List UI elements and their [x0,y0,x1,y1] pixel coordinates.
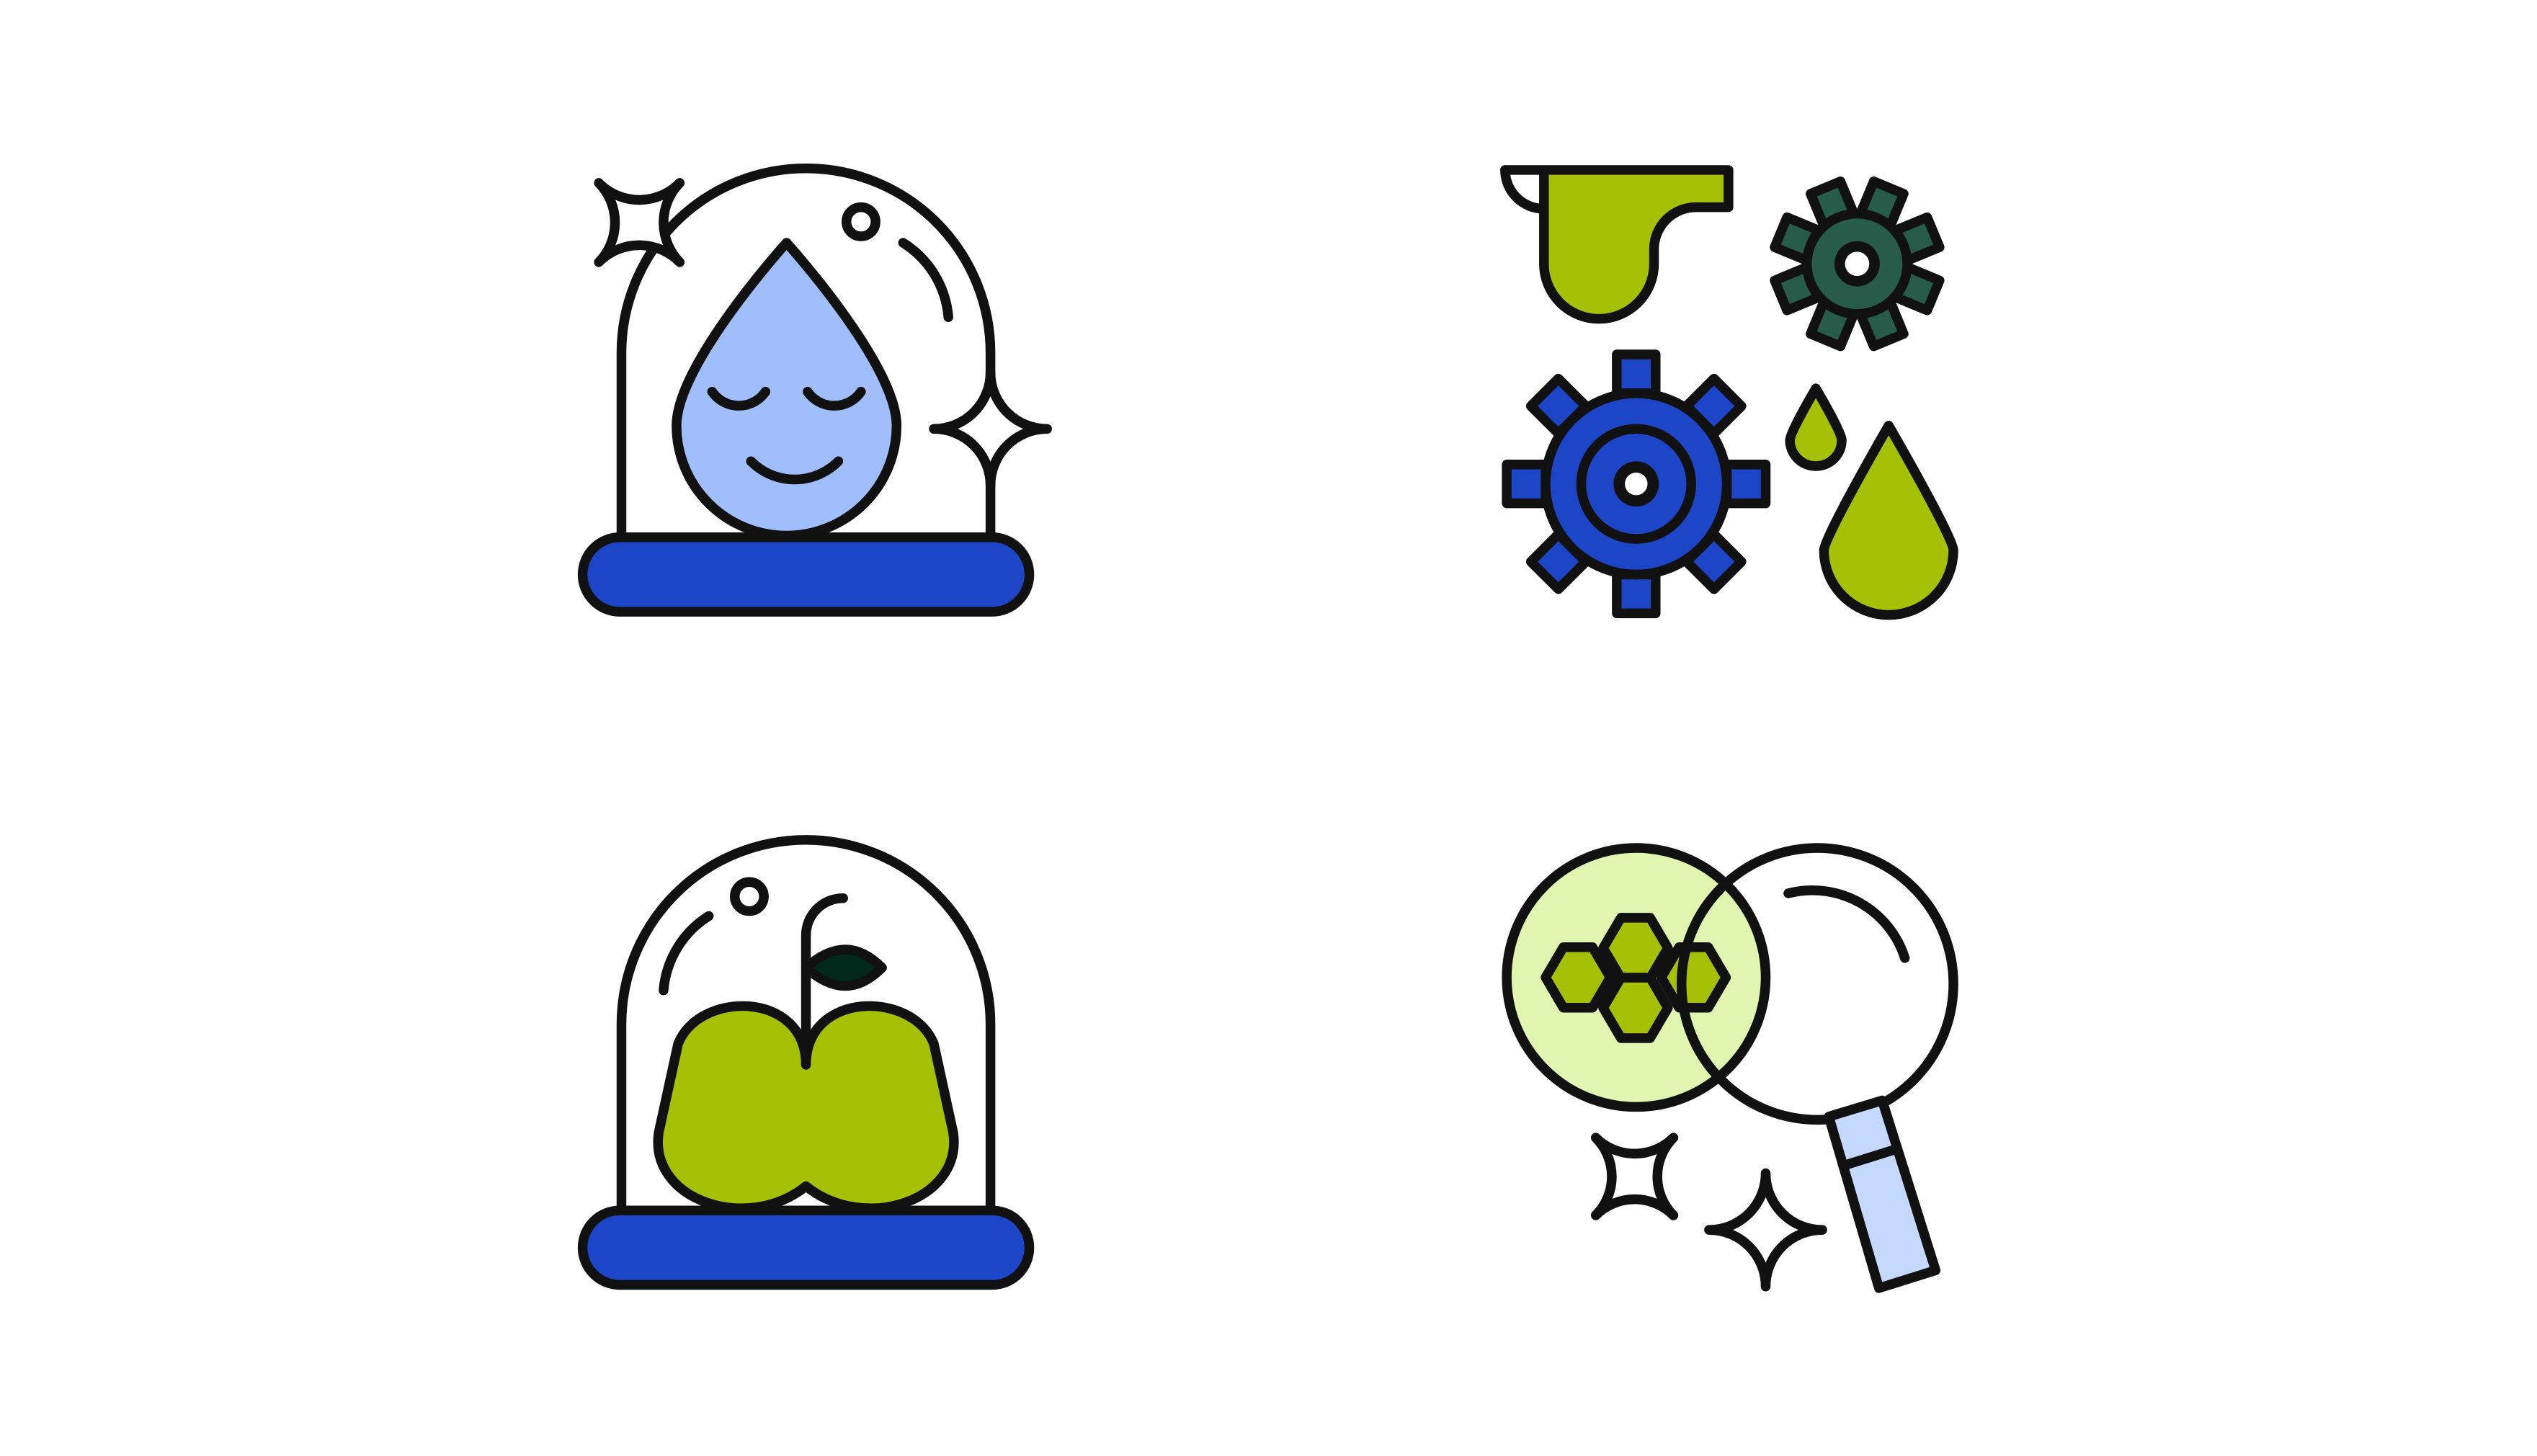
stem [806,898,843,1065]
apple [658,1006,954,1208]
lens outline [1682,848,1953,1120]
drop [677,243,896,535]
small gear [1749,156,1965,372]
big drop [1824,426,1953,615]
sparkle right [934,372,1047,486]
big gear [1507,354,1766,613]
sparkle left [599,183,679,262]
sparkle [1596,1138,1673,1215]
dome [622,169,991,537]
base [583,537,1030,612]
dome [622,840,991,1210]
small drop [1790,388,1842,466]
face [712,392,861,480]
lens fill [1682,848,1953,1120]
bubble [735,882,764,911]
icon: magnifier with molecule [1507,848,1953,1288]
base [583,1210,1030,1285]
bubble [847,207,875,236]
hexagons [1546,918,1726,1038]
icon: apple under dome [583,840,1030,1285]
lens arc [1788,890,1905,958]
icon: water drop under dome [583,169,1047,612]
sparkle [1709,1174,1822,1287]
reflection arc [664,916,709,991]
icon: faucet with gears [1505,156,1965,615]
handle [1829,1100,1935,1288]
leaf [806,950,882,986]
reflection arc [903,243,948,317]
faucet [1505,170,1729,319]
green circle [1507,848,1766,1107]
